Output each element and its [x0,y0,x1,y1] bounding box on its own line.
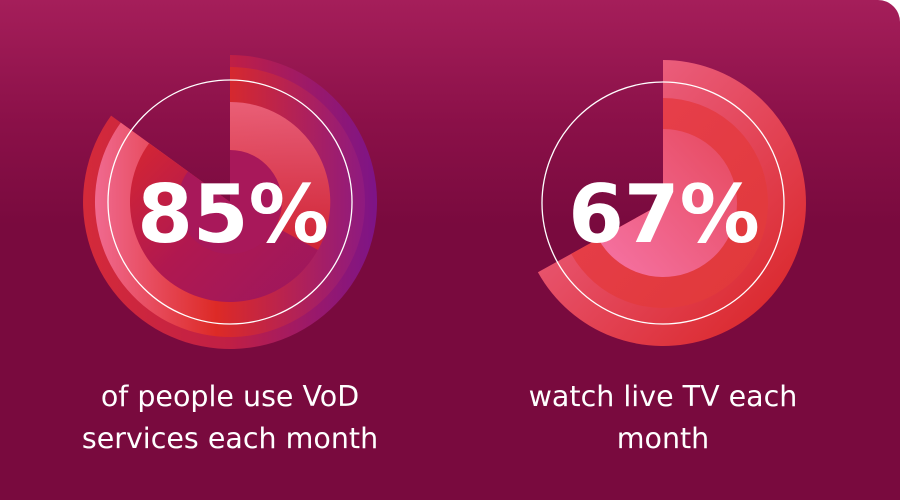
number: 85%: 85% [137,168,329,261]
caption: VoD [82,380,378,455]
caption: live TV: month [617,422,709,455]
chart: 67% [538,60,806,346]
caption: VoD: services each month [82,422,378,455]
caption: live TV: watch live TV each [529,380,797,413]
chart: 85% [83,55,377,349]
caption: live TV [529,380,797,455]
number: 67%: 67% [568,168,760,261]
caption: VoD: of people use VoD [101,380,359,413]
